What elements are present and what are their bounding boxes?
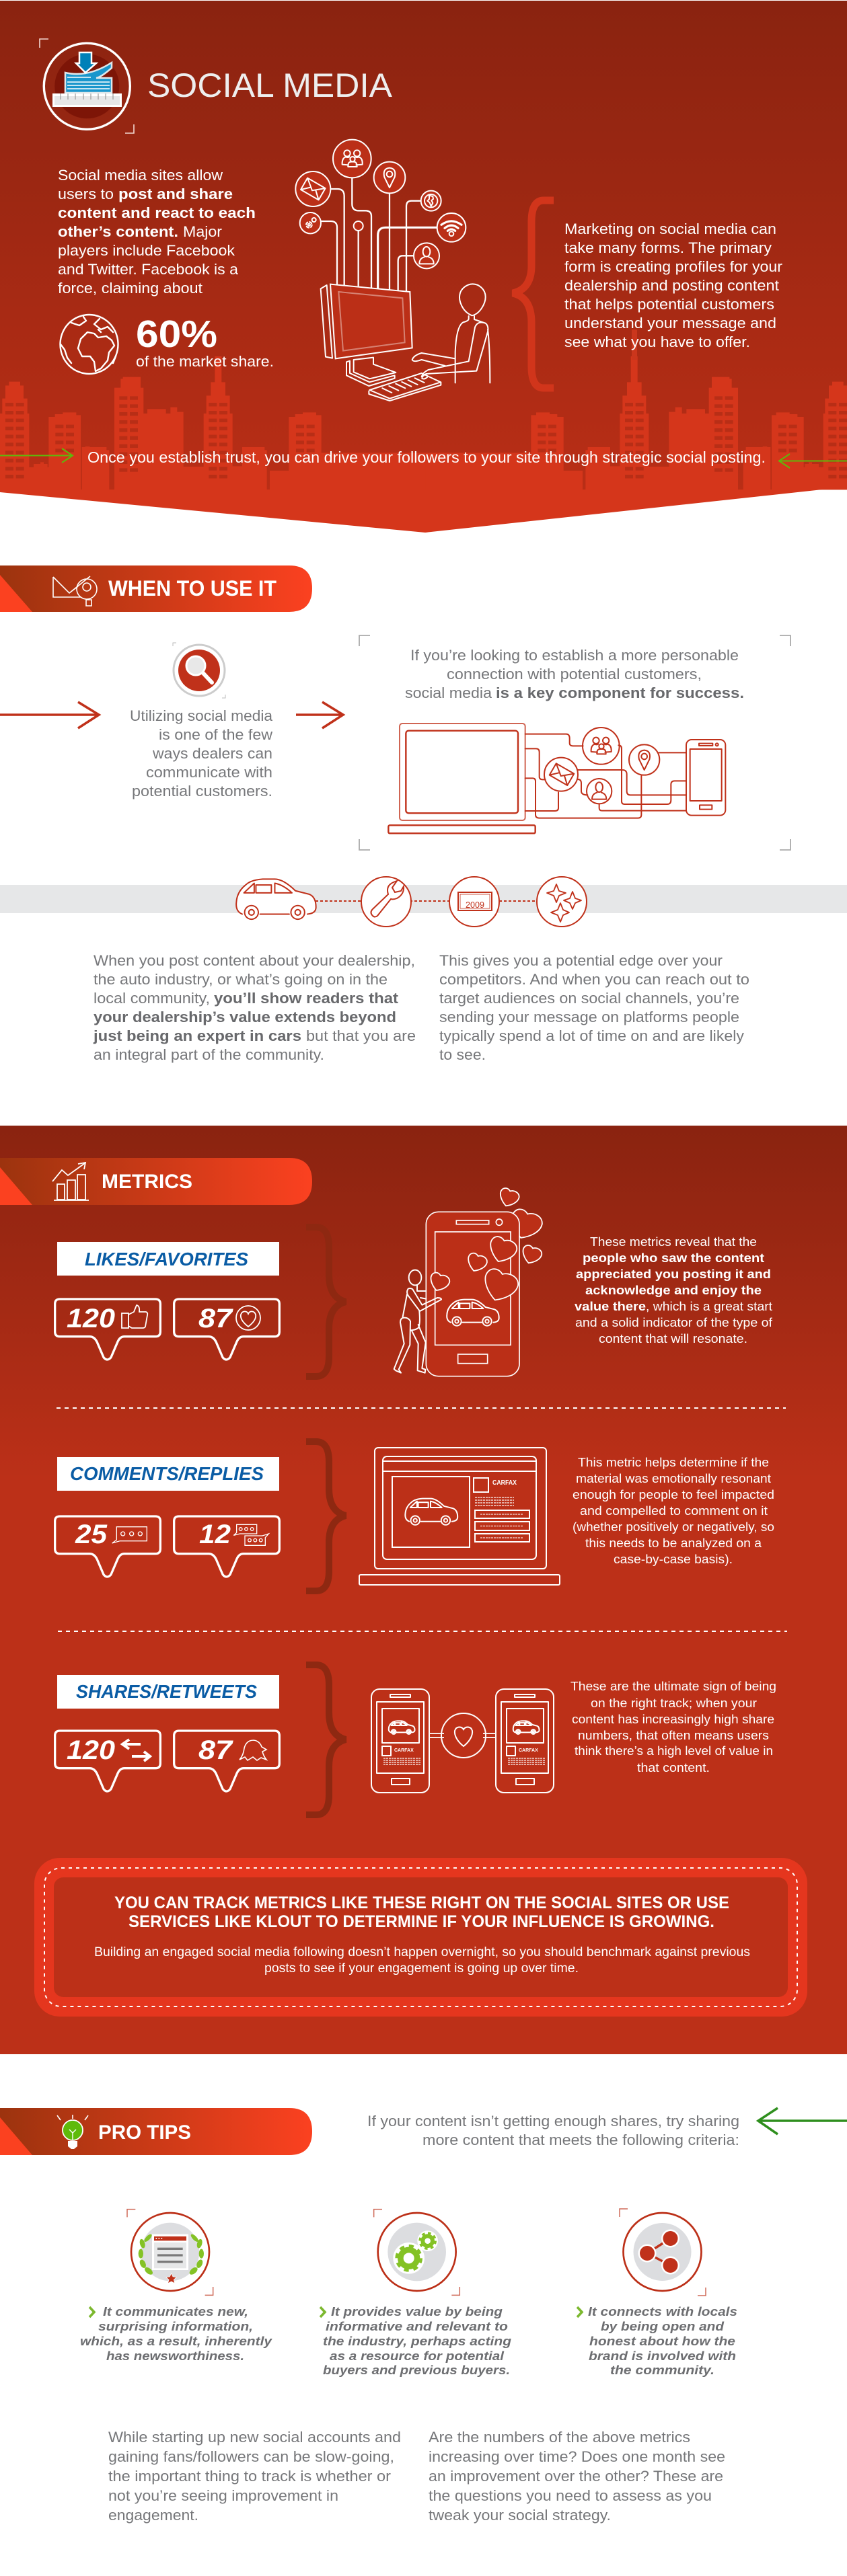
- tip text: by being open and: [601, 2320, 725, 2333]
- text block: right bottom: tweak your social strategy.: [429, 2507, 611, 2524]
- text block: left column: local community,: [94, 990, 210, 1007]
- metric: comments: [55, 1442, 774, 1591]
- icon: wrench: [361, 877, 411, 927]
- text block: These metrics reveal that the: [590, 1235, 757, 1249]
- text block: intro: users to: [58, 186, 114, 202]
- chevron: [577, 2307, 582, 2317]
- text block: right column: competitors. And when you can reach out to: [439, 971, 749, 988]
- hero panel: [0, 1, 847, 533]
- text block: left column: your dealership’s value extends beyond: [94, 1009, 396, 1025]
- text block: material was emotionally resonant: [576, 1471, 771, 1485]
- arrow: [0, 702, 99, 728]
- text block: criteria: [367, 2113, 739, 2148]
- text block: , which is a great start: [646, 1299, 772, 1313]
- icon: car: [236, 879, 316, 919]
- text block: left bottom: gaining fans/followers can be slow-going,: [108, 2448, 394, 2465]
- text block: right column: [439, 952, 749, 1063]
- speech bubbles: [55, 1516, 279, 1577]
- text block: right column: target audiences on social channels, you’re: [439, 990, 739, 1007]
- text block: marketing forms: [564, 221, 782, 350]
- gray band: [0, 885, 847, 913]
- section header: [0, 1158, 312, 1205]
- icon: globe: [61, 315, 118, 374]
- text block: [575, 1235, 773, 1345]
- tip text: [323, 2305, 511, 2377]
- text block: left column: but that you are: [306, 1027, 416, 1044]
- text block: utilizing: communicate with: [146, 764, 272, 781]
- brace: [513, 200, 554, 388]
- text block: acknowledge and enjoy the: [585, 1283, 762, 1297]
- icon: social media badge: [40, 39, 134, 133]
- text block: intro: Major: [183, 223, 222, 240]
- text block: left bottom: [108, 2429, 401, 2524]
- chevron: [320, 2307, 325, 2317]
- tip text: which, as a result, inherently: [80, 2335, 272, 2348]
- text block: think there’s a high level of value in: [575, 1744, 773, 1758]
- tip text: [588, 2305, 737, 2377]
- text block: left bottom: the important thing to track is whether or: [108, 2468, 391, 2485]
- illustration: laptop and phone network: [388, 724, 725, 833]
- text block: this needs to be analyzed on a: [585, 1536, 762, 1550]
- text block: right bottom: [429, 2429, 725, 2524]
- tip text: informative and relevant to: [326, 2320, 508, 2333]
- text block: criteria: If your content isn’t getting enough shares, try sharing: [367, 2113, 739, 2130]
- label: COMMENTS/REPLIES: [70, 1463, 264, 1484]
- text block: marketing forms: see what you have to offer.: [564, 334, 750, 350]
- text block: marketing forms: Marketing on social media can: [564, 221, 776, 237]
- stat: 60%: of the market share.: [136, 353, 274, 370]
- speech bubbles: 25: [75, 1520, 108, 1549]
- stat: 60%: 60%: [136, 313, 217, 356]
- text block: right column: to see.: [439, 1046, 486, 1063]
- tip text: the community.: [610, 2364, 714, 2377]
- label: [57, 1457, 279, 1491]
- text block: intro: content and react to each: [58, 204, 256, 221]
- section header: [0, 565, 312, 612]
- text block: right bottom: the questions you need to assess as you: [429, 2487, 712, 2504]
- brace: [306, 1442, 346, 1591]
- text block: people who saw the content: [583, 1251, 764, 1265]
- text block: and compelled to comment on it: [580, 1504, 768, 1518]
- arrow: [296, 702, 343, 728]
- icon: light bulb: [57, 2115, 88, 2149]
- speech bubbles: 120: [67, 1735, 115, 1765]
- tip 3: [577, 2209, 737, 2377]
- text block: [573, 1455, 774, 1566]
- text block: content has increasingly high share: [572, 1712, 774, 1726]
- callout body: posts to see if your engagement is going up over time.: [264, 1961, 579, 1976]
- speech bubbles: 87: [198, 1735, 233, 1765]
- callout heading: [114, 1894, 729, 1931]
- text block: These are the ultimate sign of being: [570, 1679, 776, 1693]
- section: pro tips: [0, 2108, 847, 2524]
- text block: utilizing: potential customers.: [132, 783, 272, 799]
- text block: content that will resonate.: [599, 1331, 747, 1345]
- brace: [306, 1227, 346, 1376]
- tip text: brand is involved with: [589, 2349, 736, 2363]
- text block: case-by-case basis).: [614, 1552, 733, 1566]
- tip text: surprising information,: [98, 2320, 253, 2333]
- text block: marketing forms: dealership and posting content: [564, 277, 779, 294]
- text block: right column: sending your message on platforms people: [439, 1009, 739, 1025]
- text block: marketing forms: take many forms. The primary: [564, 239, 772, 256]
- tip text: has newsworthiness.: [106, 2349, 244, 2363]
- text block: This metric helps determine if the: [578, 1455, 769, 1469]
- text block: intro: post and share: [118, 186, 233, 202]
- section header: WHEN TO USE IT: [108, 576, 277, 600]
- icon: year 2009: [449, 877, 499, 927]
- text block: right column: This gives you a potential edge over your: [439, 952, 723, 969]
- arrow: green right: [779, 454, 847, 468]
- tip 1: [80, 2210, 272, 2363]
- text block: utilizing: ways dealers can: [152, 745, 272, 762]
- label: LIKES/FAVORITES: [85, 1249, 248, 1270]
- icon: year 2009: 2009: [466, 900, 484, 910]
- metric: likes: [55, 1188, 773, 1376]
- tip text: as a resource for potential: [330, 2349, 505, 2363]
- callout body: [94, 1945, 750, 1976]
- text block: intro: other’s content.: [58, 223, 178, 240]
- text block: right bottom: an improvement over the other? These are: [429, 2468, 723, 2485]
- icon: envelope with bulb: [53, 576, 97, 606]
- brace: [306, 1665, 346, 1815]
- text block: right bottom: Are the numbers of the above metrics: [429, 2429, 690, 2446]
- icon: bar chart: [52, 1163, 89, 1200]
- text block: utilizing: Utilizing social media: [130, 707, 273, 724]
- title: SOCIAL MEDIA: [147, 67, 393, 104]
- text block: left bottom: not you’re seeing improvement in: [108, 2487, 338, 2504]
- illustration: two phones sharing: [371, 1689, 554, 1793]
- text block: and a solid indicator of the type of: [575, 1315, 773, 1329]
- text block: key component: connection with potential customers,: [447, 666, 702, 682]
- text block: intro: and Twitter. Facebook is a: [58, 261, 239, 278]
- section header: PRO TIPS: [98, 2121, 191, 2144]
- text block: key component: is a key component for success.: [496, 685, 744, 701]
- label: [57, 1242, 279, 1276]
- text block: appreciated you posting it and: [576, 1267, 771, 1281]
- text block: intro: Social media sites allow: [58, 167, 223, 184]
- text block: left bottom: While starting up new social accounts and: [108, 2429, 401, 2446]
- text block: numbers, that often means users: [578, 1728, 769, 1742]
- text block: right column: typically spend a lot of time on and are likely: [439, 1027, 744, 1044]
- icon: share nodes: [620, 2209, 706, 2296]
- icon: newsworthy document: [127, 2210, 213, 2295]
- label: [57, 1675, 279, 1709]
- tip text: the industry, perhaps acting: [323, 2335, 511, 2348]
- section: when to use it: [0, 565, 847, 1063]
- metrics background: [0, 1126, 847, 2054]
- illustration: phone with hearts: [394, 1188, 542, 1376]
- arrow: green: [758, 2108, 847, 2134]
- text block: left column: [93, 952, 416, 1063]
- callout panel: [34, 1858, 807, 2017]
- tip text: It communicates new,: [103, 2305, 248, 2318]
- text block: utilizing: is one of the few: [159, 726, 272, 743]
- stat: 60%: [136, 313, 274, 370]
- text block: key component: If you’re looking to establish a more personable: [410, 647, 739, 664]
- icon: gears: [374, 2210, 459, 2295]
- illustration: laptop with listing: CARFAX: [492, 1479, 517, 1487]
- speech bubbles: 12: [199, 1520, 231, 1549]
- callout body: Building an engaged social media following doesn’t happen overnight, so you should benchmark against previous: [94, 1945, 750, 1959]
- tip text: buyers and previous buyers.: [323, 2364, 510, 2377]
- text block: enough for people to feel impacted: [573, 1487, 774, 1501]
- text block: marketing forms: understand your message and: [564, 315, 776, 331]
- icon: magnifier badge: [173, 643, 225, 698]
- text block: marketing forms: that helps potential customers: [564, 296, 774, 313]
- text block: left column: you’ll show readers that: [214, 990, 399, 1007]
- tip text: It provides value by being: [331, 2305, 503, 2318]
- text block: left column: the auto industry, or what’s going on in the: [94, 971, 388, 988]
- speech bubbles: [55, 1731, 279, 1791]
- text block: value there: [575, 1299, 646, 1313]
- timeline dotted connector: [316, 900, 538, 902]
- text block: left column: an integral part of the community.: [94, 1046, 324, 1063]
- illustration: laptop with listing: [359, 1448, 560, 1585]
- text block: left column: When you post content about your dealership,: [94, 952, 415, 969]
- skyline: [0, 329, 847, 490]
- label: SHARES/RETWEETS: [76, 1681, 257, 1702]
- text block: criteria: more content that meets the following criteria:: [422, 2132, 739, 2148]
- tip 2: [320, 2210, 511, 2377]
- section: metrics: [0, 1126, 847, 2054]
- text block: key component: [405, 647, 744, 701]
- text block: marketing forms: form is creating profiles for your: [564, 258, 782, 275]
- tip text: It connects with locals: [588, 2305, 737, 2318]
- tip text: honest about how the: [589, 2335, 735, 2348]
- section header: [0, 2108, 312, 2155]
- text block: intro: force, claiming about: [58, 280, 202, 297]
- callout heading: YOU CAN TRACK METRICS LIKE THESE RIGHT ON THE SOCIAL SITES OR USE: [114, 1894, 729, 1912]
- text block: key component: social media: [405, 685, 492, 701]
- speech bubbles: [55, 1299, 279, 1360]
- text block: intro: [58, 167, 256, 297]
- callout heading: SERVICES LIKE KLOUT TO DETERMINE IF YOUR INFLUENCE IS GROWING.: [128, 1912, 714, 1931]
- section header: METRICS: [102, 1171, 192, 1193]
- text block: on the right track; when your: [591, 1696, 757, 1710]
- text block: left column: just being an expert in cars: [93, 1027, 301, 1044]
- text block: right bottom: increasing over time? Does one month see: [429, 2448, 725, 2465]
- corner brackets: [359, 635, 790, 850]
- hero pennant base: [0, 487, 847, 533]
- hero background: [0, 1, 847, 490]
- text block: that content.: [637, 1760, 710, 1774]
- illustration: person at computer with social icons: [295, 140, 490, 401]
- text block: [570, 1679, 776, 1774]
- arrow: green left: [0, 448, 73, 463]
- speech bubbles: 87: [198, 1304, 233, 1333]
- callout line: Once you establish trust, you can drive your followers to your site through strategic social posting.: [87, 448, 766, 466]
- speech bubbles: 120: [67, 1304, 115, 1333]
- tip text: [80, 2305, 272, 2363]
- text block: left bottom: engagement.: [108, 2507, 198, 2524]
- icon: sparkles: [537, 877, 587, 927]
- text block: (whether positively or negatively, so: [573, 1520, 774, 1534]
- chevron: [89, 2307, 94, 2317]
- text block: utilizing: [130, 707, 273, 799]
- metric: shares: [55, 1665, 776, 1815]
- text block: intro: players include Facebook: [58, 242, 235, 259]
